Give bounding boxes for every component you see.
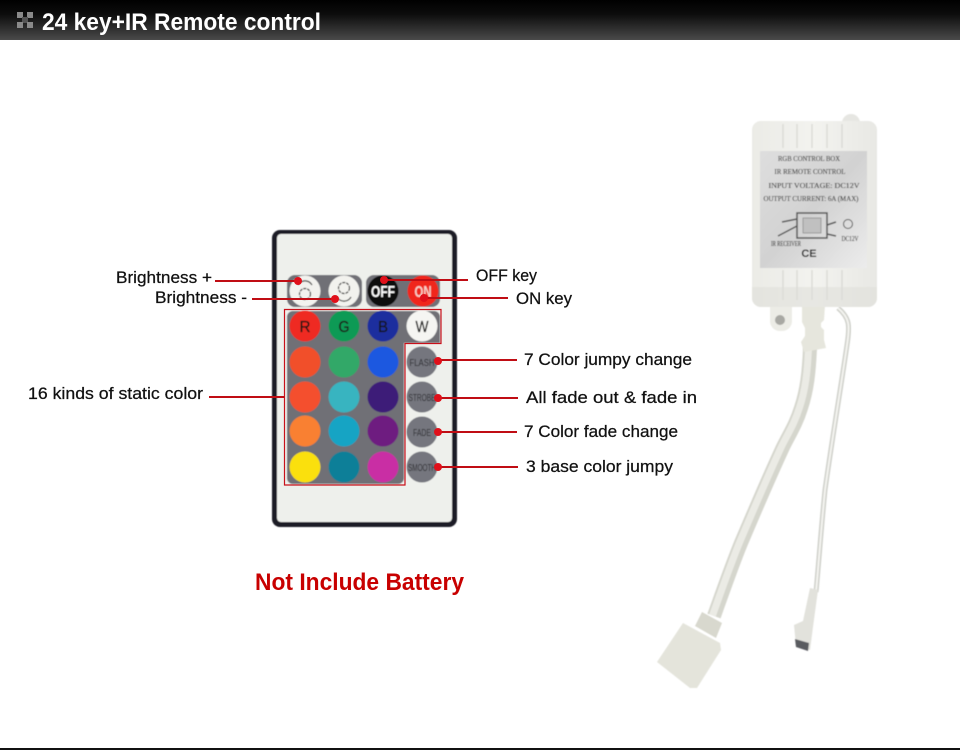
label: fade: 7 Color fade change [524,422,678,441]
product label plate: DC12V [842,234,859,243]
colour key panel [287,311,440,484]
product label plate: OUTPUT CURRENT: 6A (MAX) [764,194,859,203]
plug [695,612,722,638]
label: flash: 7 Color jumpy change [524,350,692,369]
brightness key panel [287,275,362,307]
colour keys: B [378,319,388,336]
remote control [272,230,457,527]
bottom rule [0,748,960,750]
mode keys: FADE [413,428,431,439]
mode keys: SMOOTH [408,463,436,474]
label: Brightness +: Brightness + [116,268,212,287]
power key panel [366,275,440,307]
label: OFF key: OFF key [476,266,537,285]
colour keys: W [416,319,429,336]
label: 16 kinds: 16 kinds of static color [28,384,203,403]
title: 24 key+IR Remote control [42,9,321,36]
colour keys: G [338,319,350,336]
product label plate: INPUT VOLTAGE: DC12V [768,181,860,190]
colour keys: R [300,319,310,336]
product label plate: CE [801,248,817,260]
icon: checker squares [17,12,33,28]
header bar [0,0,960,40]
mode keys: STROBE [408,393,436,404]
label: smooth: 3 base color jumpy [526,457,674,476]
label: Brightness -: Brightness - [155,288,247,307]
colour keys [290,310,438,482]
product label plate: IR RECEIVER [771,239,801,248]
callout outline: 16 colour region [284,310,441,485]
product label plate [760,151,867,268]
power key panel: OFF [371,284,395,301]
note: not include battery: Not Include Battery [255,569,465,596]
cable: thick with connector [657,348,810,688]
control box [752,114,877,352]
product label plate: RGB CONTROL BOX [778,154,841,163]
power key panel: ON [414,284,432,301]
cable: thin [794,308,849,651]
label: ON key: ON key [516,289,572,308]
mode keys: FLASH [410,358,434,369]
product label plate: IR REMOTE CONTROL [774,167,846,176]
mode keys [406,346,438,482]
label: strobe: All fade out & fade in [526,388,697,407]
callout leaders [209,276,518,471]
